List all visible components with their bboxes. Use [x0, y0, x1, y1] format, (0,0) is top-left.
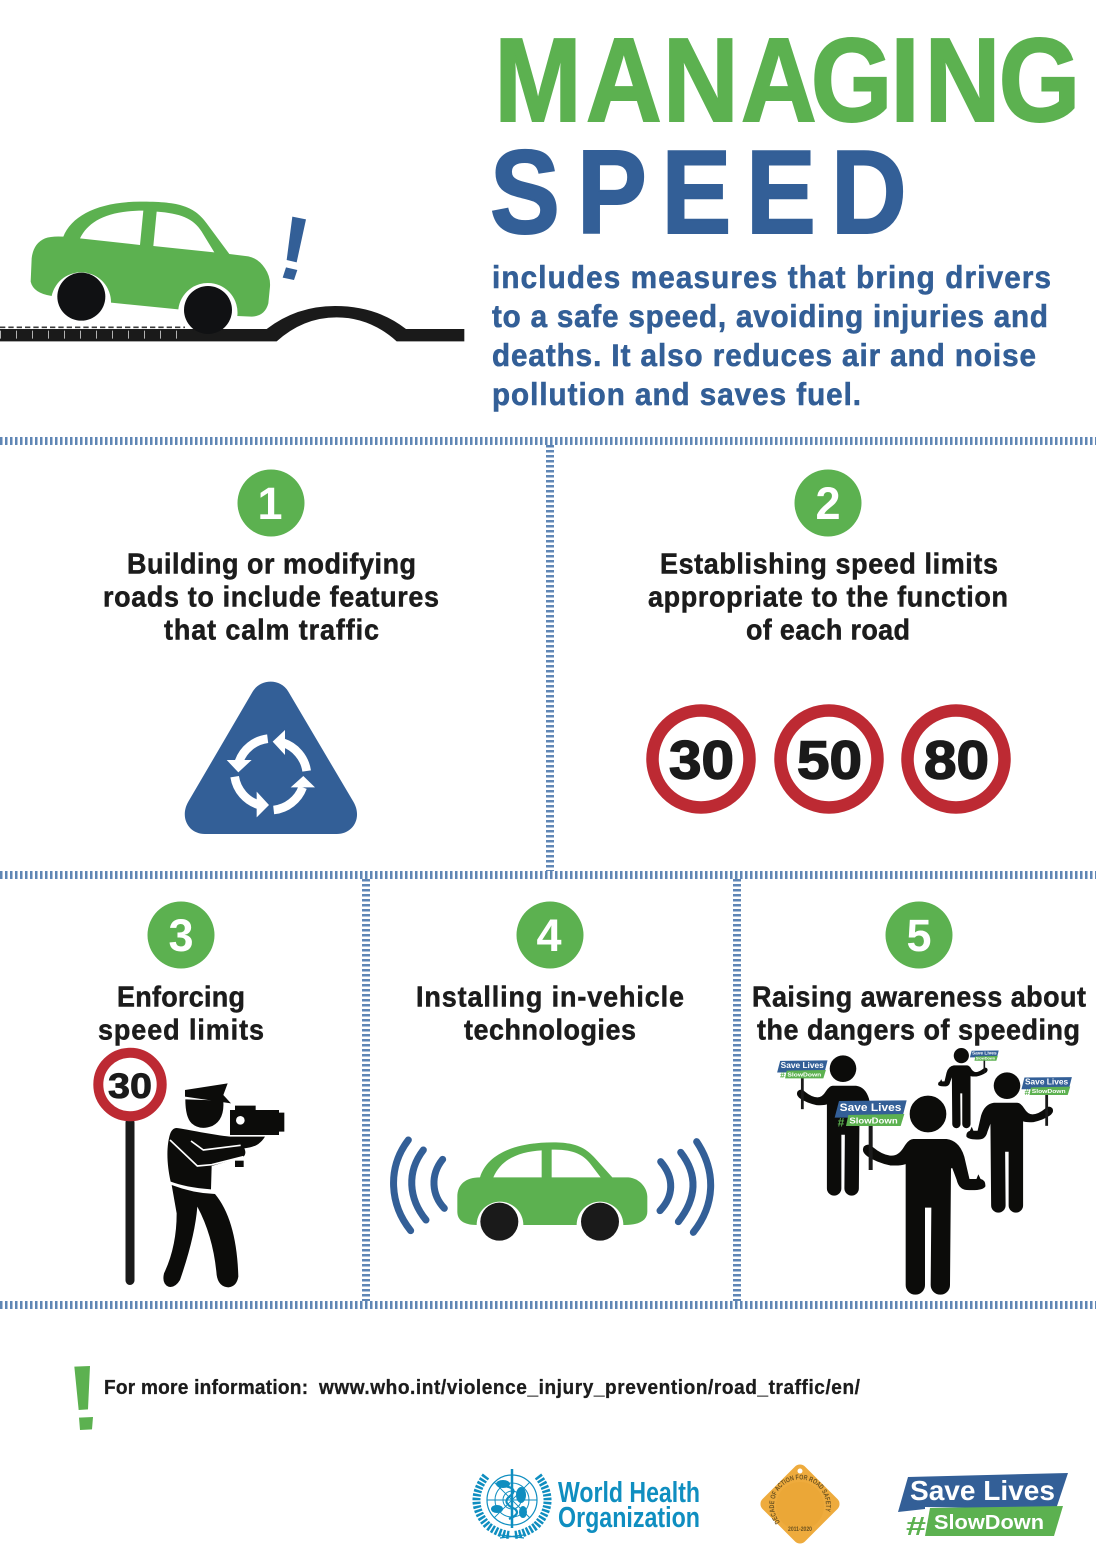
car wheels	[57, 273, 232, 334]
icon: roundabout triangle sign	[185, 682, 357, 834]
campaigner: far centre	[938, 1048, 999, 1128]
speed sign 80	[908, 710, 1004, 808]
WHO wordmark: World Health	[558, 1477, 700, 1509]
step 2 heading	[648, 548, 1008, 646]
step 4 heading: technologies	[464, 1014, 636, 1046]
icon: connected car	[457, 1142, 647, 1241]
panel: step 4	[394, 902, 711, 1241]
intro text: includes measures that bring drivers	[492, 260, 1051, 295]
number badge 3: 3	[168, 910, 194, 961]
footer link text: www.who.int/violence_injury_prevention/road_traffic/en/	[318, 1376, 860, 1399]
panel: step 2	[648, 470, 1008, 808]
campaigner: right: Save Lives	[1025, 1078, 1069, 1087]
Save Lives SlowDown logo	[898, 1473, 1068, 1541]
Decade of Action badge: DECADE OF ACTION FOR ROAD SAFETY	[769, 1474, 831, 1525]
campaigner: left: #	[780, 1070, 785, 1080]
step 2 heading: appropriate to the function	[648, 581, 1008, 613]
Save Lives SlowDown logo: #	[906, 1511, 927, 1541]
step 4 heading: Installing in-vehicle	[416, 981, 684, 1013]
number badge 1: 1	[257, 478, 283, 529]
campaigner: right: #	[1024, 1087, 1029, 1097]
number badge 5	[886, 902, 952, 968]
step 3 heading: speed limits	[98, 1014, 264, 1046]
WHO wordmark	[558, 1477, 700, 1534]
campaigner: right: SlowDown	[1032, 1089, 1066, 1095]
Decade of Action badge: 2011-2020	[788, 1527, 813, 1533]
step 5 heading: Raising awareness about	[752, 981, 1086, 1013]
WHO logo	[476, 1469, 700, 1538]
number badge 1	[238, 470, 304, 536]
intro text: pollution and saves fuel.	[492, 377, 861, 412]
campaigner: left: Save Lives	[781, 1061, 824, 1070]
icon: signal waves left	[394, 1140, 444, 1231]
number badge 5: 5	[906, 910, 932, 961]
footer link text: For more information:	[104, 1376, 308, 1399]
step 2 heading: of each road	[746, 614, 910, 646]
number badge 4	[516, 902, 584, 968]
Save Lives SlowDown logo: Save Lives	[910, 1475, 1055, 1506]
green car	[31, 202, 270, 317]
step 5 heading	[752, 981, 1086, 1046]
intro text: to a safe speed, avoiding injuries and	[492, 299, 1048, 334]
intro text: deaths. It also reduces air and noise	[492, 338, 1036, 373]
number badge 2: 2	[815, 478, 841, 529]
speed sign 30	[652, 710, 750, 808]
campaigner: front: Save Lives	[840, 1102, 901, 1114]
step 3 heading	[98, 981, 264, 1046]
campaigner: left: SlowDown	[787, 1072, 822, 1078]
icon: police officer with speed camera	[163, 1083, 284, 1287]
footer exclamation mark	[74, 1366, 93, 1430]
number badge 3	[148, 902, 214, 968]
campaigner: front: #	[838, 1115, 845, 1129]
campaigner: front: SlowDown	[849, 1116, 898, 1125]
dotted dividers	[0, 441, 1096, 1305]
title: managing: MANAGING	[494, 14, 1080, 146]
road texture	[0, 327, 187, 335]
car windows	[80, 211, 214, 252]
speed sign 80: 80	[924, 730, 989, 790]
campaigner: front	[835, 1095, 986, 1295]
campaigner: far centre: Save Lives	[972, 1051, 997, 1056]
step 2 heading: Establishing speed limits	[660, 548, 998, 580]
step 3 heading: Enforcing	[117, 981, 245, 1013]
step 5 heading: the dangers of speeding	[757, 1014, 1080, 1046]
exclamation mark	[283, 217, 306, 280]
campaigner: right	[966, 1072, 1072, 1213]
number badge 4: 4	[536, 910, 562, 961]
speed sign 50	[780, 710, 878, 808]
step 4 heading	[416, 981, 684, 1046]
icon: speed sign on pole	[98, 1053, 162, 1285]
number badge 2	[794, 470, 862, 536]
Decade of Action badge	[760, 1464, 840, 1544]
icon: speed sign on pole: 30	[108, 1067, 152, 1106]
road with speed bump	[0, 306, 464, 341]
panel: step 3	[98, 902, 284, 1287]
title: speed: SPEED	[490, 126, 907, 258]
intro text	[492, 260, 1051, 412]
Save Lives SlowDown logo: SlowDown	[934, 1512, 1044, 1534]
campaigner: far centre: SlowDown	[976, 1057, 995, 1061]
WHO wordmark: Organization	[558, 1502, 700, 1534]
step 1 heading: that calm traffic	[164, 614, 379, 646]
hero illustration: car on speed bump	[0, 202, 464, 341]
icon: signal waves right	[660, 1142, 711, 1232]
step 1 heading: Building or modifying	[127, 548, 416, 580]
step 1 heading	[103, 548, 439, 646]
speed sign 50: 50	[797, 730, 862, 790]
WHO emblem	[476, 1469, 548, 1538]
step 1 heading: roads to include features	[103, 581, 439, 613]
campaigner: left	[777, 1055, 884, 1196]
icon: group of campaigners	[777, 1048, 1072, 1295]
panel: step 1	[103, 470, 439, 834]
speed sign 30: 30	[669, 730, 734, 790]
panel: step 5	[752, 902, 1086, 1295]
